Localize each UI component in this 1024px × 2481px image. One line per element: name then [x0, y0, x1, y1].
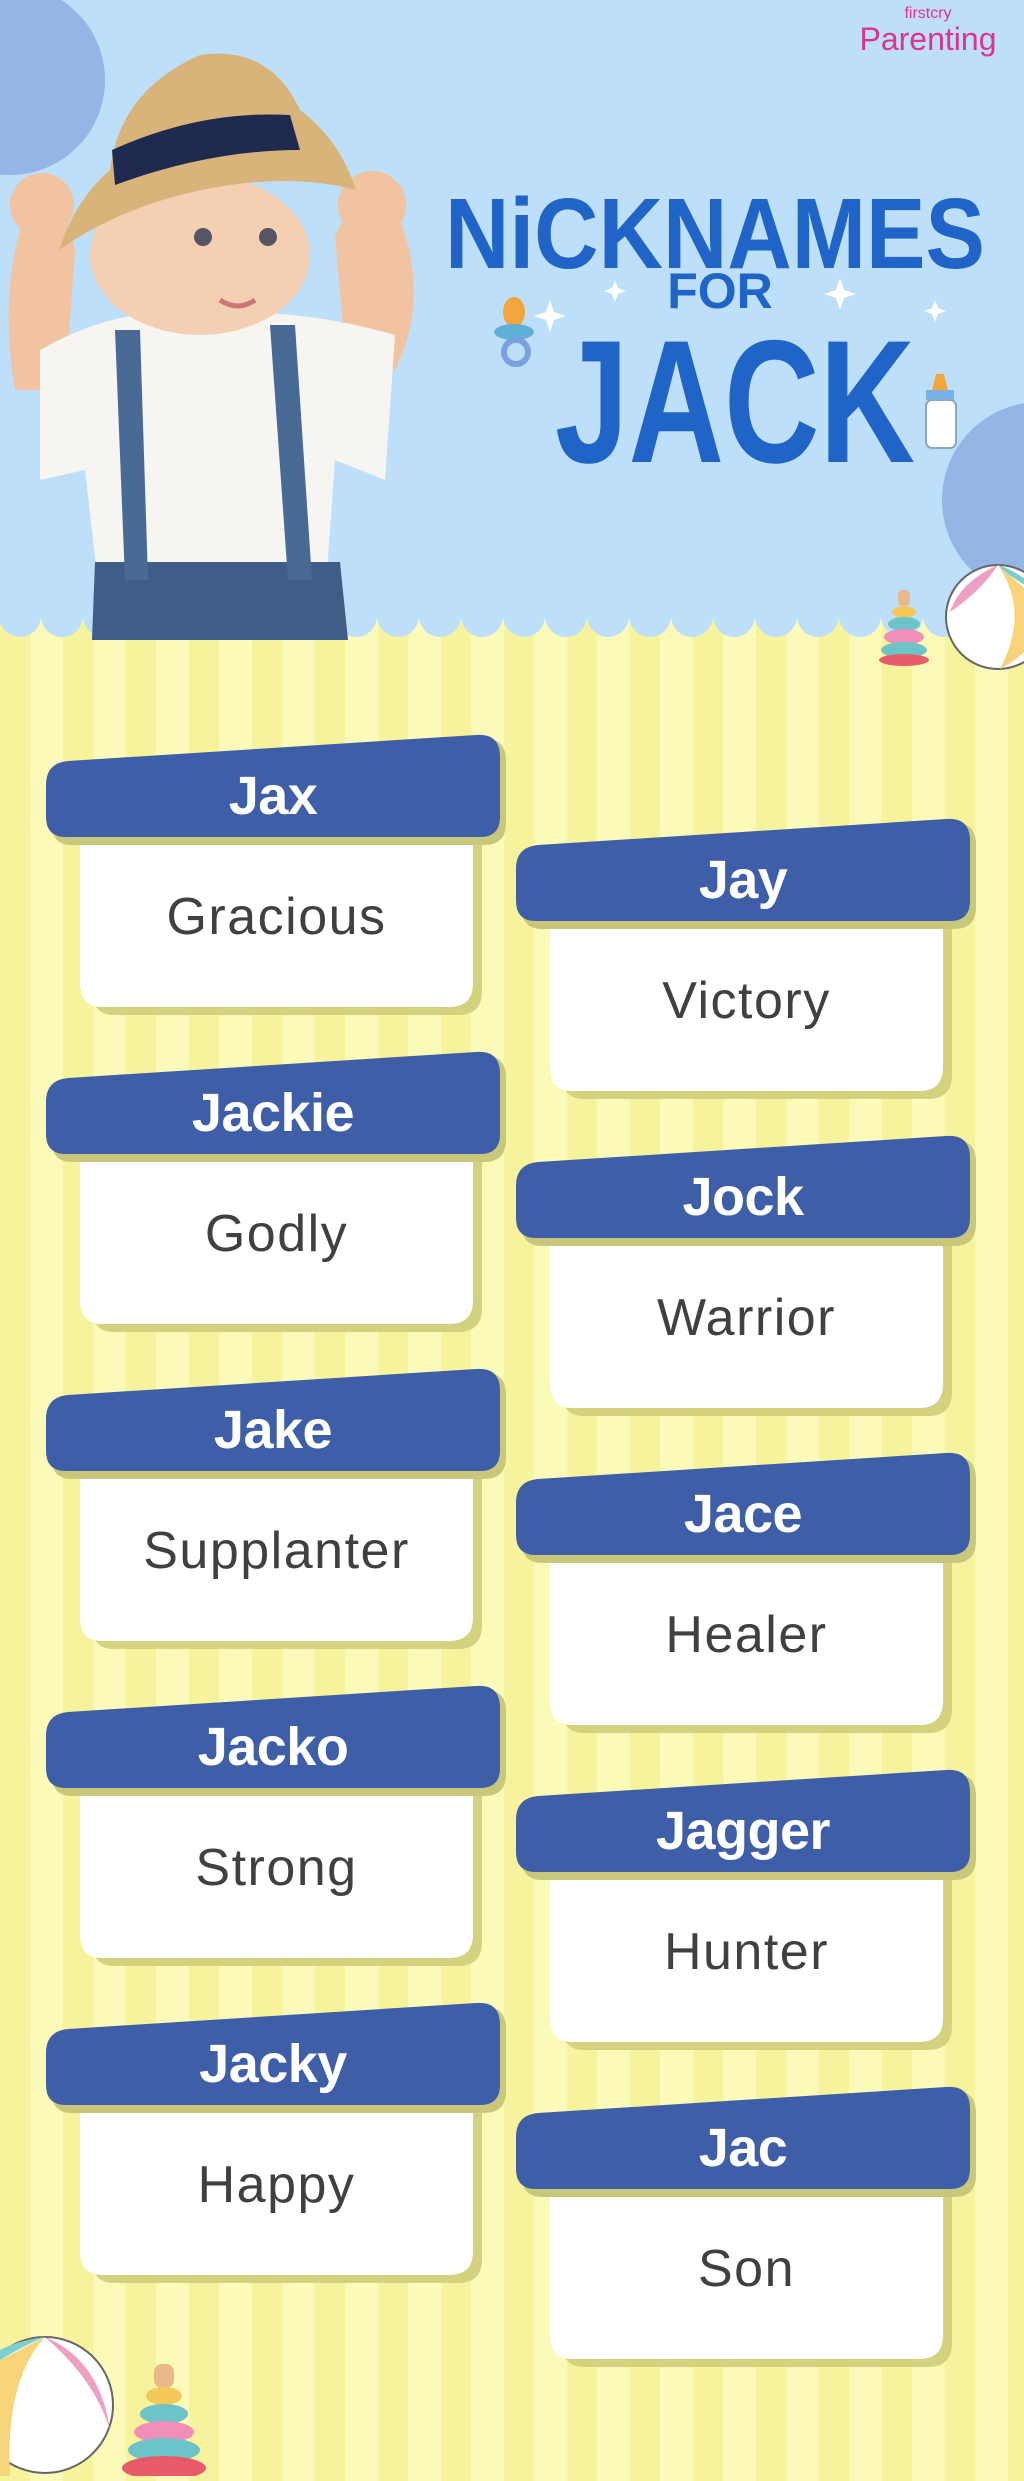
- card: Jackie: [46, 1052, 506, 1332]
- icon: bottle: [925, 374, 957, 449]
- icon: ball top: [945, 564, 1024, 670]
- card: Jacky: [46, 2002, 506, 2283]
- card: Jock: [516, 1136, 976, 1416]
- card: Jock: Jock: [682, 1167, 804, 1227]
- card: Jake: Jake: [214, 1400, 332, 1460]
- card: Jax: Jax: [229, 766, 317, 826]
- icon: ring stack top: [879, 590, 929, 666]
- card: Jackie: Godly: [205, 1205, 348, 1263]
- logo: Parenting: [860, 21, 996, 57]
- card: Jay: Victory: [662, 972, 831, 1030]
- card: Jagger: Jagger: [656, 1801, 830, 1861]
- card: Jagger: [516, 1770, 976, 2050]
- card: Jax: Gracious: [166, 888, 387, 946]
- card: Jace: Healer: [665, 1606, 828, 1664]
- card: Jake: Supplanter: [143, 1522, 410, 1580]
- card: Jacko: Strong: [195, 1839, 358, 1897]
- logo: firstcry: [904, 5, 952, 22]
- header background: [0, 0, 1024, 637]
- title: FOR: [667, 263, 773, 319]
- card: Jagger: Hunter: [664, 1923, 829, 1981]
- logo: [860, 5, 996, 57]
- card: Jacko: Jacko: [198, 1717, 348, 1777]
- card: Jace: [516, 1452, 976, 1733]
- card: Jackie: Jackie: [192, 1083, 354, 1143]
- arms: [9, 215, 75, 390]
- icon: pacifier: [494, 297, 534, 367]
- card: Jac: [516, 2086, 976, 2367]
- card: Jac: Jac: [699, 2118, 787, 2178]
- hat: [59, 54, 356, 250]
- card: Jacky: Happy: [198, 2156, 355, 2214]
- card: Jock: Warrior: [657, 1289, 836, 1347]
- card: Jay: Jay: [699, 850, 787, 910]
- face: [90, 175, 310, 335]
- card: Jac: Son: [698, 2240, 795, 2298]
- card: Jay: [516, 818, 976, 1099]
- shirt: [40, 312, 395, 600]
- card: Jake: [46, 1368, 506, 1649]
- jeans: [92, 562, 348, 640]
- icon: ring stack bottom: [122, 2364, 206, 2476]
- icon: ball bottom: [0, 2336, 114, 2476]
- card: Jace: Jace: [684, 1484, 802, 1544]
- card: Jacko: [46, 1686, 506, 1966]
- title: [445, 178, 985, 470]
- suspenders: [115, 330, 148, 580]
- baby photo: [8, 54, 414, 640]
- card: Jacky: Jacky: [199, 2034, 347, 2094]
- card: Jax: [46, 734, 506, 1015]
